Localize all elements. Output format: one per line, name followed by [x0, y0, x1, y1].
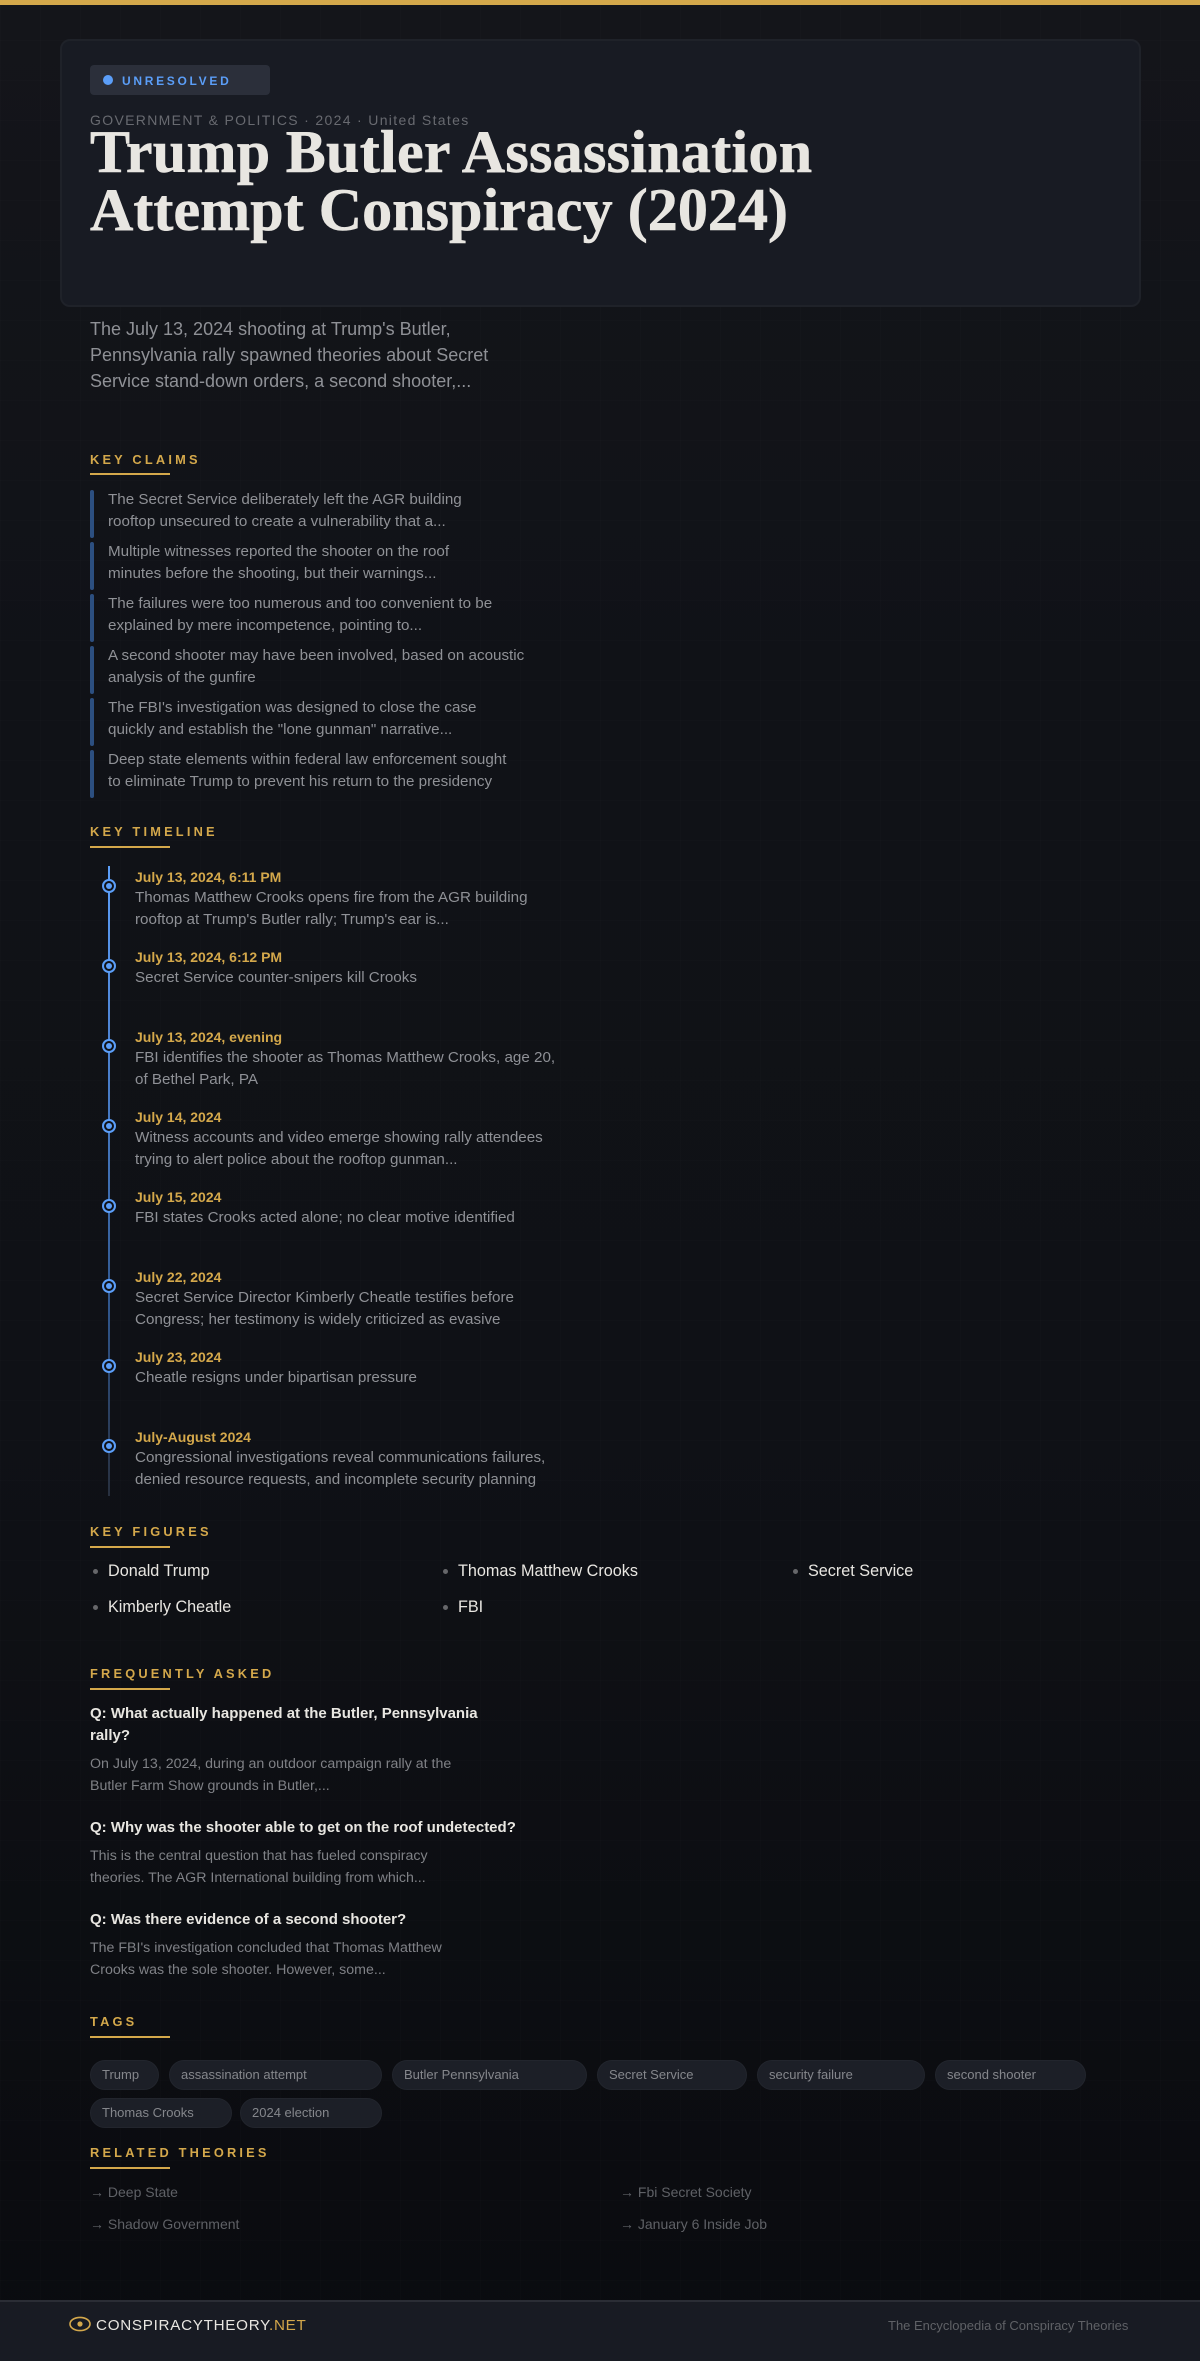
panel: key figures	[93, 1562, 913, 1616]
figure: Kimberly Cheatle: Kimberly Cheatle	[108, 1598, 231, 1616]
FAQ answer 2: This is the central question that has fueled conspiracy	[90, 1848, 428, 1864]
tag: Trump: Trump	[102, 2067, 139, 2082]
FAQ answer 2: theories. The AGR International building from which...	[90, 1870, 426, 1886]
event: July 15	[102, 1189, 515, 1226]
FAQ question 2: Q: Why was the shooter able to get on the roof undetected?	[90, 1819, 516, 1836]
summary text: The July 13, 2024 shooting at Trump's Butler,	[90, 319, 451, 339]
heading underline: related theories	[90, 2167, 170, 2169]
claim 3	[90, 594, 492, 642]
heading underline: frequently asked	[90, 1688, 170, 1690]
icon: eye logo	[69, 2316, 91, 2332]
panel: hero header	[60, 39, 1141, 307]
panel: timeline	[102, 866, 555, 1496]
title: Attempt Conspiracy (2024)	[90, 177, 788, 243]
FAQ answer 2	[90, 1848, 428, 1886]
FAQ answer 3	[90, 1940, 442, 1978]
claim 1	[90, 490, 462, 538]
event: July 22: July 22, 2024	[135, 1269, 221, 1285]
claim 3: The failures were too numerous and too convenient to be	[108, 595, 492, 612]
event: July 14: trying to alert police about the rooftop gunman...	[135, 1151, 458, 1168]
claim 5: quickly and establish the "lone gunman" narrative...	[108, 721, 452, 738]
summary text: Pennsylvania rally spawned theories about Secret	[90, 345, 488, 365]
claim 5	[90, 698, 476, 746]
tag: Secret Service: Secret Service	[609, 2067, 694, 2082]
related: Fbi Secret Society: → Fbi Secret Society	[620, 2184, 752, 2200]
category and date line: GOVERNMENT & POLITICS · 2024 · United States	[90, 112, 470, 128]
event: July 23: July 23, 2024	[135, 1349, 221, 1365]
heading underline: key timeline	[90, 846, 170, 848]
title: Trump Butler Assassination	[90, 119, 812, 185]
event: July 13 evening: FBI identifies the shooter as Thomas Matthew Crooks, age 20,	[135, 1049, 555, 1066]
icon: status dot	[103, 75, 113, 85]
heading underline: key claims	[90, 473, 170, 475]
figure: Donald Trump: Donald Trump	[108, 1562, 210, 1580]
claim 3: explained by mere incompetence, pointing to...	[108, 617, 422, 634]
event: July-August: July-August 2024	[135, 1429, 251, 1445]
FAQ question 1: Q: What actually happened at the Butler, Pennsylvania	[90, 1705, 478, 1722]
claim 2: Multiple witnesses reported the shooter on the roof	[108, 543, 449, 560]
summary text: Service stand-down orders, a second shooter,...	[90, 371, 471, 391]
heading: key timeline: KEY TIMELINE	[90, 824, 218, 839]
tag: security failure	[757, 2060, 925, 2090]
event: July 22: Secret Service Director Kimberly Cheatle testifies before	[135, 1289, 514, 1306]
event: July 15: July 15, 2024	[135, 1189, 221, 1205]
event: July 13 6:12 PM	[102, 949, 417, 986]
tag: Butler Pennsylvania: Butler Pennsylvania	[404, 2067, 519, 2082]
FAQ question 3: Q: Was there evidence of a second shooter?	[90, 1911, 406, 1928]
tag: Trump	[90, 2060, 159, 2090]
tag: Butler Pennsylvania	[392, 2060, 587, 2090]
footer tagline: The Encyclopedia of Conspiracy Theories	[888, 2318, 1128, 2333]
FAQ answer 1	[90, 1756, 451, 1794]
FAQ answer 3: Crooks was the sole shooter. However, some...	[90, 1962, 386, 1978]
event: July 13 evening	[102, 1029, 555, 1088]
claim 6: to eliminate Trump to prevent his return to the presidency	[108, 773, 492, 790]
event: July 15: FBI states Crooks acted alone; no clear motive identified	[135, 1209, 515, 1226]
claim 4: analysis of the gunfire	[108, 669, 256, 686]
event: July 13 6:11 PM	[102, 869, 528, 928]
event: July-August: denied resource requests, and incomplete security planning	[135, 1471, 536, 1488]
tag: assassination attempt	[169, 2060, 382, 2090]
heading: key figures: KEY FIGURES	[90, 1524, 212, 1539]
event: July 13 evening: of Bethel Park, PA	[135, 1071, 258, 1088]
event: July 14: Witness accounts and video emerge showing rally attendees	[135, 1129, 543, 1146]
figure: FBI	[443, 1598, 483, 1616]
tag: assassination attempt: assassination attempt	[181, 2067, 307, 2082]
FAQ answer 1: Butler Farm Show grounds in Butler,...	[90, 1778, 330, 1794]
heading underline: tags	[90, 2036, 170, 2038]
tag: second shooter	[935, 2060, 1086, 2090]
event: July-August: Congressional investigations reveal communications failures,	[135, 1449, 545, 1466]
claim 6: Deep state elements within federal law enforcement sought	[108, 751, 506, 768]
event: July 13 evening: July 13, 2024, evening	[135, 1029, 282, 1045]
claim 6	[90, 750, 506, 798]
event: July 13 6:11 PM: rooftop at Trump's Butler rally; Trump's ear is...	[135, 911, 449, 928]
figure: Secret Service: Secret Service	[808, 1562, 913, 1580]
panel: related theories	[90, 2184, 767, 2232]
event: July 13 6:11 PM: July 13, 2024, 6:11 PM	[135, 869, 281, 885]
summary text	[90, 319, 488, 391]
claim 1: The Secret Service deliberately left the AGR building	[108, 491, 462, 508]
FAQ question 1	[90, 1705, 478, 1744]
claim 4	[90, 646, 524, 694]
figure: Thomas Matthew Crooks: Thomas Matthew Crooks	[458, 1562, 638, 1580]
heading: frequently asked: FREQUENTLY ASKED	[90, 1666, 274, 1681]
figure: FBI: FBI	[458, 1598, 483, 1616]
claim 2: minutes before the shooting, but their warnings...	[108, 565, 436, 582]
claim 2	[90, 542, 450, 590]
heading: key claims: KEY CLAIMS	[90, 452, 201, 467]
status badge: unresolved	[90, 65, 270, 95]
claim 1: rooftop unsecured to create a vulnerability that a...	[108, 513, 446, 530]
related: Deep State: → Deep State	[90, 2184, 178, 2200]
tag: 2024 election: 2024 election	[252, 2105, 329, 2120]
event: July 14	[102, 1109, 543, 1168]
related: January 6 Inside Job: → January 6 Inside Job	[620, 2216, 767, 2232]
footer	[0, 2300, 1200, 2361]
panel: key claims list	[90, 490, 524, 798]
claim 4: A second shooter may have been involved, based on acoustic	[108, 647, 524, 664]
tag: 2024 election	[240, 2098, 382, 2128]
tag: Secret Service	[597, 2060, 747, 2090]
title	[90, 119, 812, 244]
event: July 13 6:12 PM: July 13, 2024, 6:12 PM	[135, 949, 282, 965]
event: July 23: Cheatle resigns under bipartisan pressure	[135, 1369, 417, 1386]
badge label: UNRESOLVED	[122, 74, 231, 88]
tag: Thomas Crooks: Thomas Crooks	[102, 2105, 194, 2120]
event: July 22	[102, 1269, 514, 1328]
claim 5: The FBI's investigation was designed to close the case	[108, 699, 476, 716]
event: July 13 6:12 PM: Secret Service counter-snipers kill Crooks	[135, 969, 417, 986]
FAQ answer 3: The FBI's investigation concluded that Thomas Matthew	[90, 1940, 442, 1956]
top accent bar	[0, 0, 1200, 5]
panel: tags	[90, 2060, 1086, 2128]
event: July 23	[102, 1349, 417, 1386]
footer logo text: CONSPIRACYTHEORY.NET	[96, 2317, 306, 2334]
event: July-August	[102, 1429, 545, 1488]
FAQ question 1: rally?	[90, 1727, 130, 1744]
heading: related theories: RELATED THEORIES	[90, 2145, 270, 2160]
event: July 13 6:11 PM: Thomas Matthew Crooks opens fire from the AGR building	[135, 889, 528, 906]
event: July 14: July 14, 2024	[135, 1109, 221, 1125]
tag: Thomas Crooks	[90, 2098, 232, 2128]
heading: tags: TAGS	[90, 2014, 137, 2029]
event: July 22: Congress; her testimony is widely criticized as evasive	[135, 1311, 500, 1328]
related: Shadow Government: → Shadow Government	[90, 2216, 239, 2232]
tag: second shooter: second shooter	[947, 2067, 1036, 2082]
FAQ answer 1: On July 13, 2024, during an outdoor campaign rally at the	[90, 1756, 451, 1772]
timeline axis	[108, 866, 110, 1496]
tag: security failure: security failure	[769, 2067, 853, 2082]
heading underline: key figures	[90, 1546, 170, 1548]
